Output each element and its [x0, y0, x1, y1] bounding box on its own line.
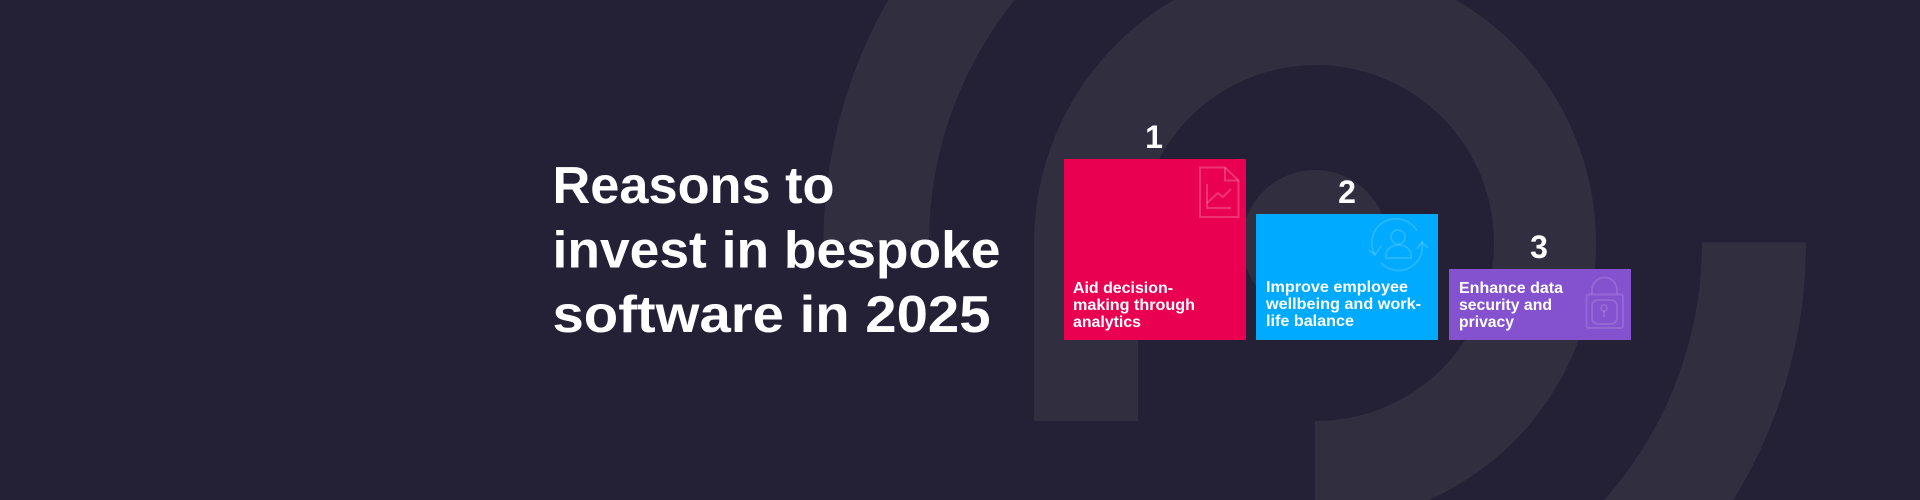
- background logo: concentric arcs: [824, 0, 1806, 500]
- title: invest in bespoke: [552, 222, 1000, 280]
- icon: person with cycle arrows: [1369, 219, 1428, 270]
- label 2: wellbeing and work-: [1265, 296, 1421, 313]
- title: software in 2025: [552, 286, 990, 344]
- logo outer arc left: [824, 0, 1023, 242]
- label 1: analytics: [1073, 314, 1141, 331]
- label 1: Aid decision-: [1073, 280, 1173, 297]
- number 2: 2: [1338, 174, 1356, 210]
- icon: document with line chart: [1200, 168, 1238, 217]
- label 3: security and: [1459, 297, 1552, 314]
- label 3: [1459, 280, 1563, 331]
- icon: padlock: [1586, 278, 1623, 328]
- label 3: Enhance data: [1459, 280, 1563, 297]
- title: Reasons to: [552, 157, 834, 215]
- label 1: [1073, 280, 1195, 331]
- label 2: [1265, 279, 1421, 330]
- purple box: [1449, 269, 1631, 340]
- reason 1: podium column: [1064, 119, 1246, 340]
- number 1: 1: [1145, 119, 1163, 155]
- logo middle spiral: [1034, 0, 1596, 500]
- red box: [1064, 159, 1246, 340]
- number 3: 3: [1530, 229, 1548, 265]
- label 2: life balance: [1266, 313, 1354, 330]
- blue box: [1256, 214, 1438, 340]
- reason 3: podium column: [1449, 229, 1631, 340]
- logo outer arc right: [1595, 242, 1806, 500]
- reason 2: podium column: [1256, 174, 1438, 340]
- label 3: privacy: [1459, 314, 1514, 331]
- title: [552, 157, 1000, 344]
- logo centre dot: [1242, 170, 1388, 316]
- label 1: making through: [1073, 297, 1195, 314]
- label 2: Improve employee: [1266, 279, 1408, 296]
